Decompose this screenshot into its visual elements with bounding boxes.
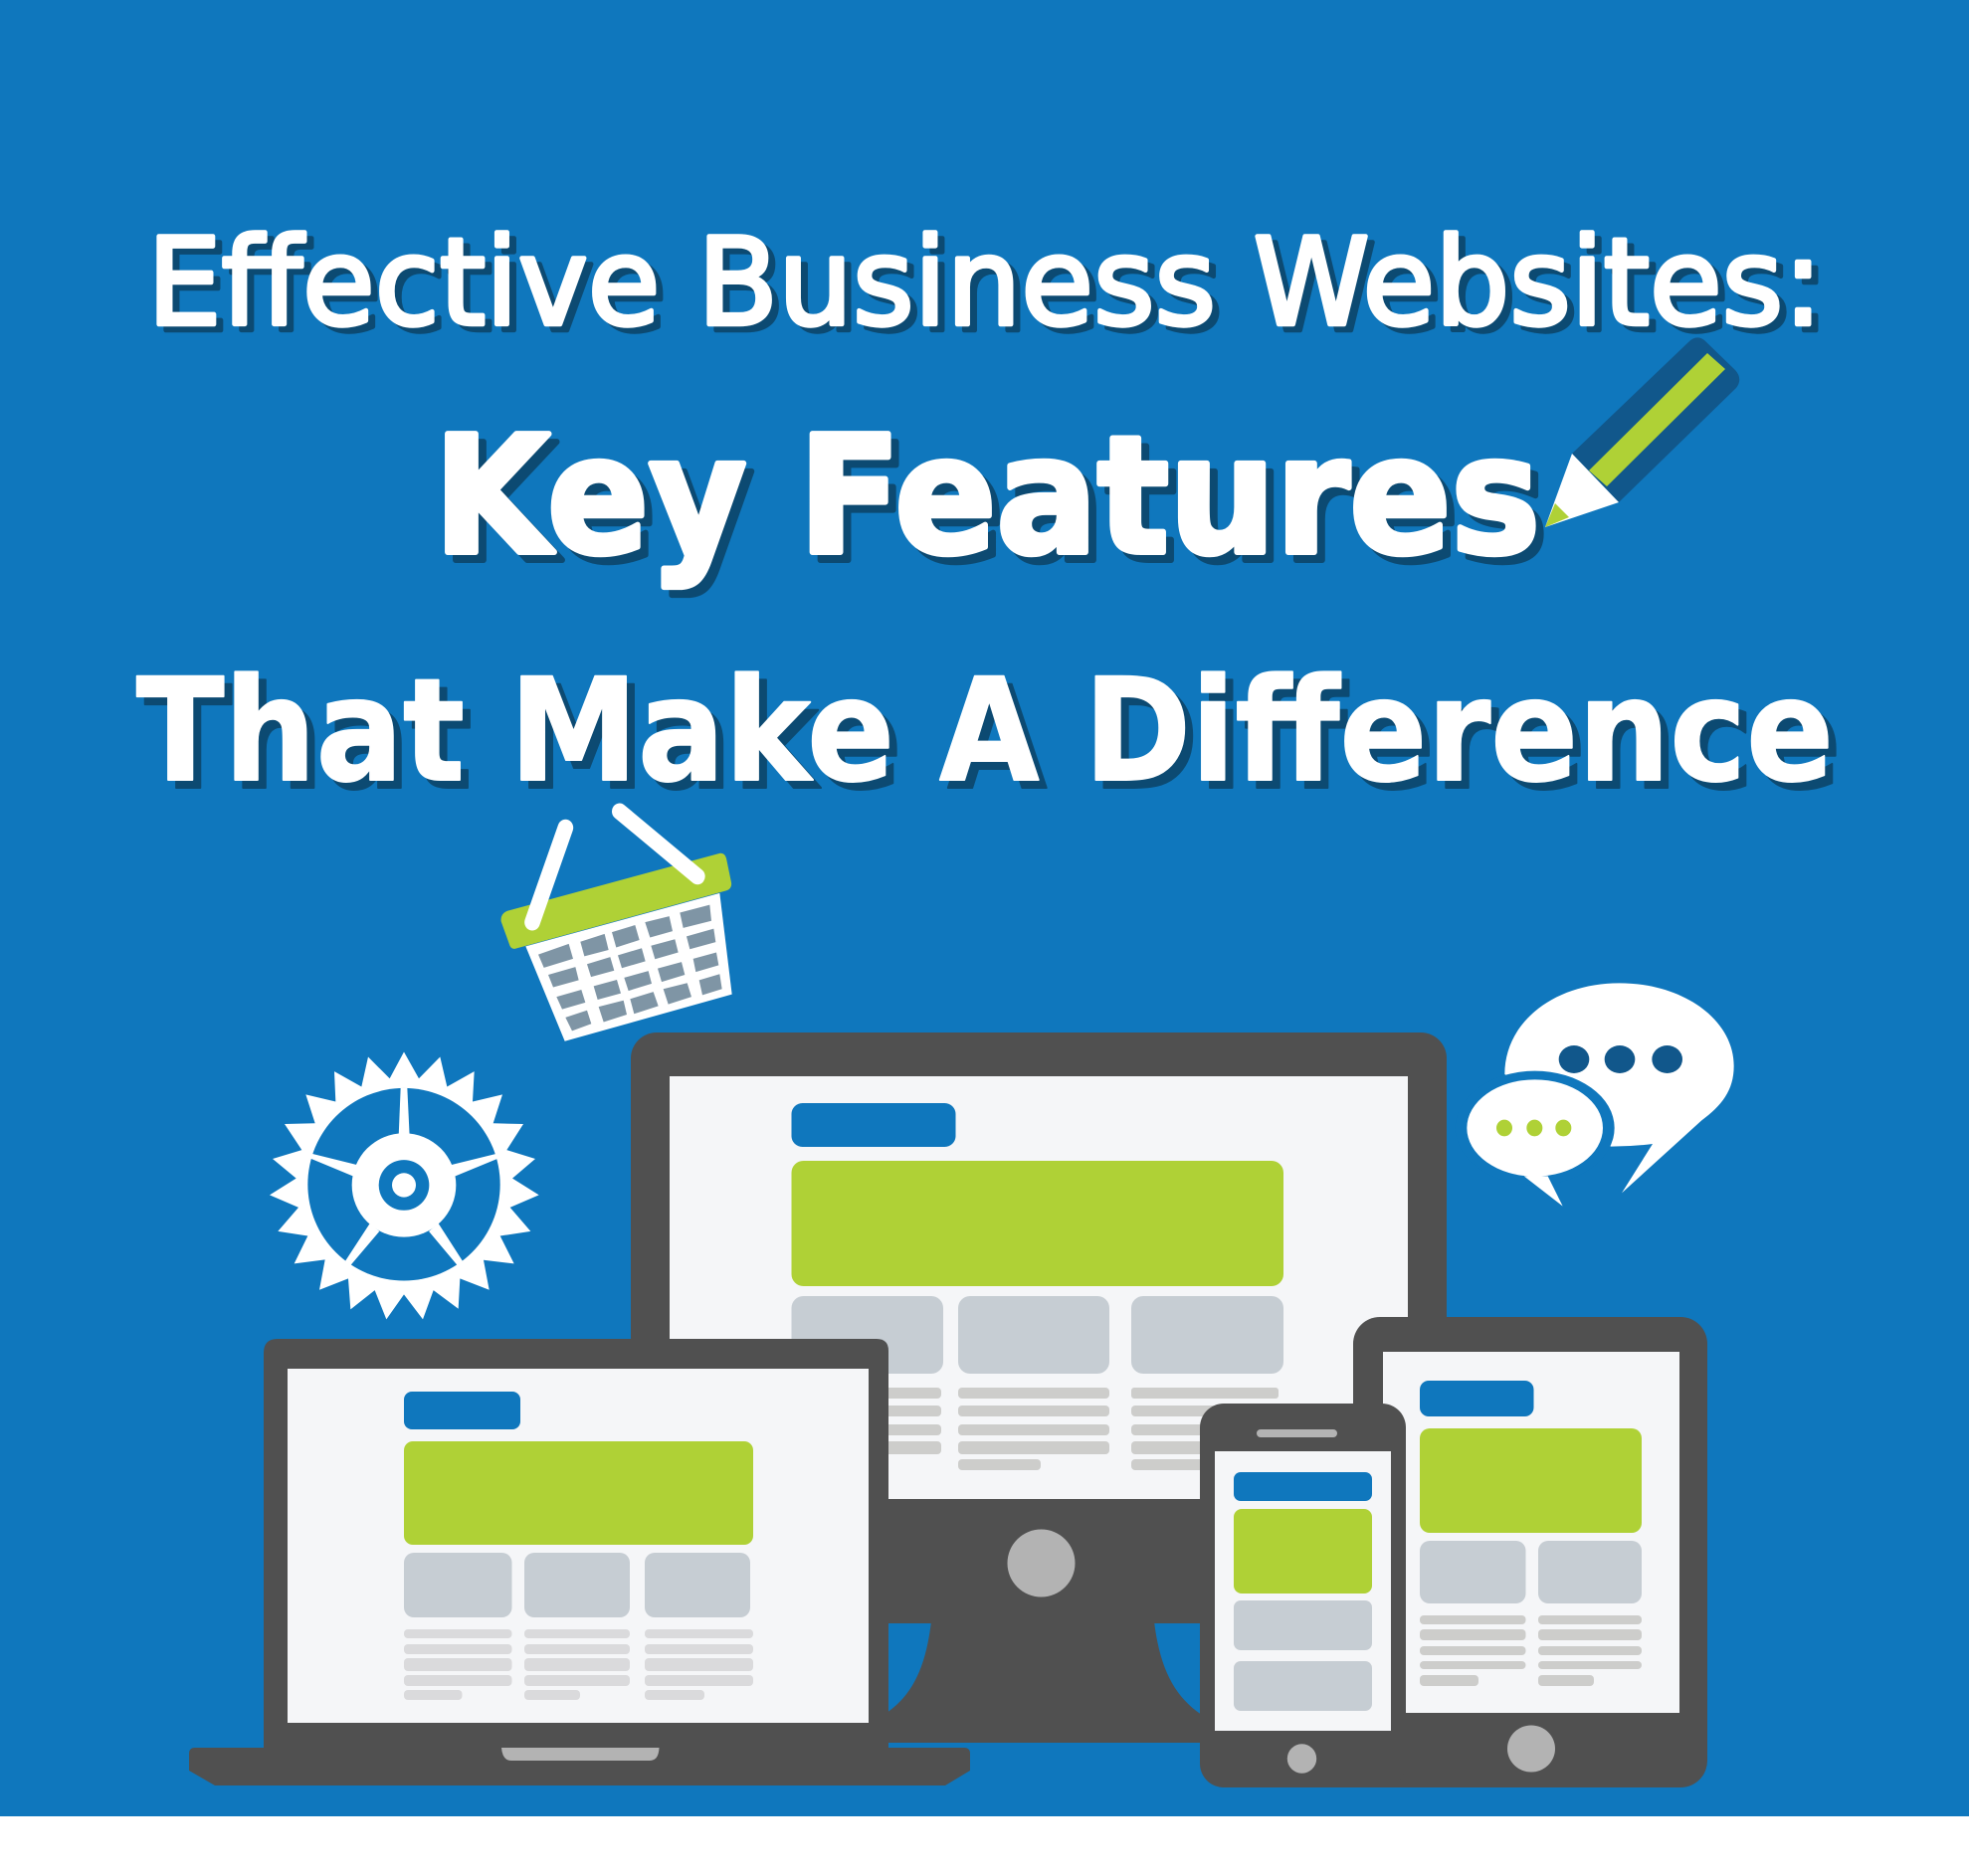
icon: shopping basket — [501, 812, 732, 1041]
icon: gear — [270, 1051, 539, 1319]
device: laptop — [189, 1339, 970, 1785]
title line 2: Key Features — [434, 403, 1540, 591]
icon: chat bubbles — [1456, 983, 1734, 1207]
device: tablet — [1353, 1317, 1707, 1787]
icon: pencil — [1545, 337, 1739, 527]
title line 1: Effective Business Websites: — [147, 213, 1823, 353]
title line 3: That Make A Difference — [136, 648, 1834, 814]
device: smartphone — [1200, 1404, 1406, 1787]
device: desktop monitor — [631, 1032, 1447, 1743]
